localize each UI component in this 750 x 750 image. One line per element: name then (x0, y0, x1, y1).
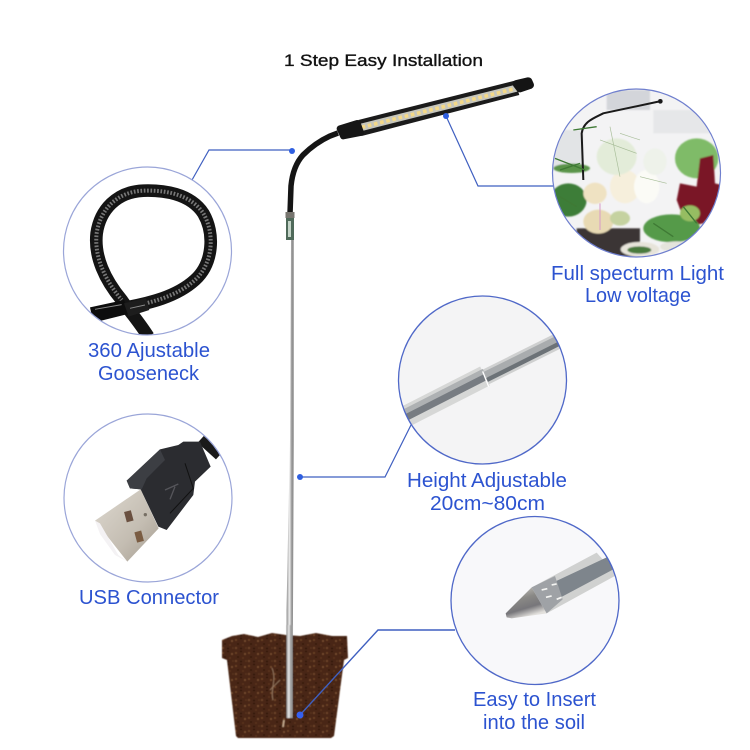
panel: height adjustable (398, 296, 567, 515)
gooseneck label (88, 340, 210, 385)
panel: easy to insert (451, 516, 619, 734)
rod photo (398, 296, 567, 464)
insert label: into the soil (483, 712, 585, 734)
connector line: gooseneck (192, 148, 295, 180)
insert label (473, 689, 596, 734)
telescopic pole (286, 240, 294, 718)
plant ring (552, 89, 720, 257)
pole in soil (286, 625, 292, 718)
lamp product (286, 81, 530, 718)
flower pot (222, 625, 348, 738)
light label: Full specturm Light (551, 263, 724, 285)
connector line: light (443, 113, 553, 186)
tip photo (506, 552, 614, 618)
panel: gooseneck (64, 167, 232, 385)
light label: Low voltage (585, 285, 691, 307)
panel: USB connector (64, 414, 232, 609)
light bar (340, 81, 530, 136)
USB photo (95, 436, 220, 562)
gooseneck label: 360 Ajustable (88, 340, 210, 362)
gooseneck photo (90, 184, 218, 334)
tip ring (451, 516, 619, 684)
panel: full spectrum light (550, 89, 724, 307)
connector (286, 212, 294, 218)
height label: 20cm~80cm (430, 493, 545, 515)
rod ring (398, 296, 566, 464)
insert label: Easy to Insert (473, 689, 596, 711)
USB ring (64, 414, 232, 582)
gooseneck arm (290, 133, 338, 214)
plant photo (550, 89, 723, 259)
connector line: height (297, 423, 412, 480)
height label: Height Adjustable (407, 470, 567, 492)
title: 1 Step Easy Installation (284, 51, 483, 70)
gooseneck label: Gooseneck (98, 363, 200, 385)
gooseneck ring (64, 167, 232, 335)
connector line: soil (296, 630, 455, 718)
USB label: USB Connector (79, 587, 219, 609)
height label (407, 470, 567, 515)
light label (551, 263, 724, 307)
